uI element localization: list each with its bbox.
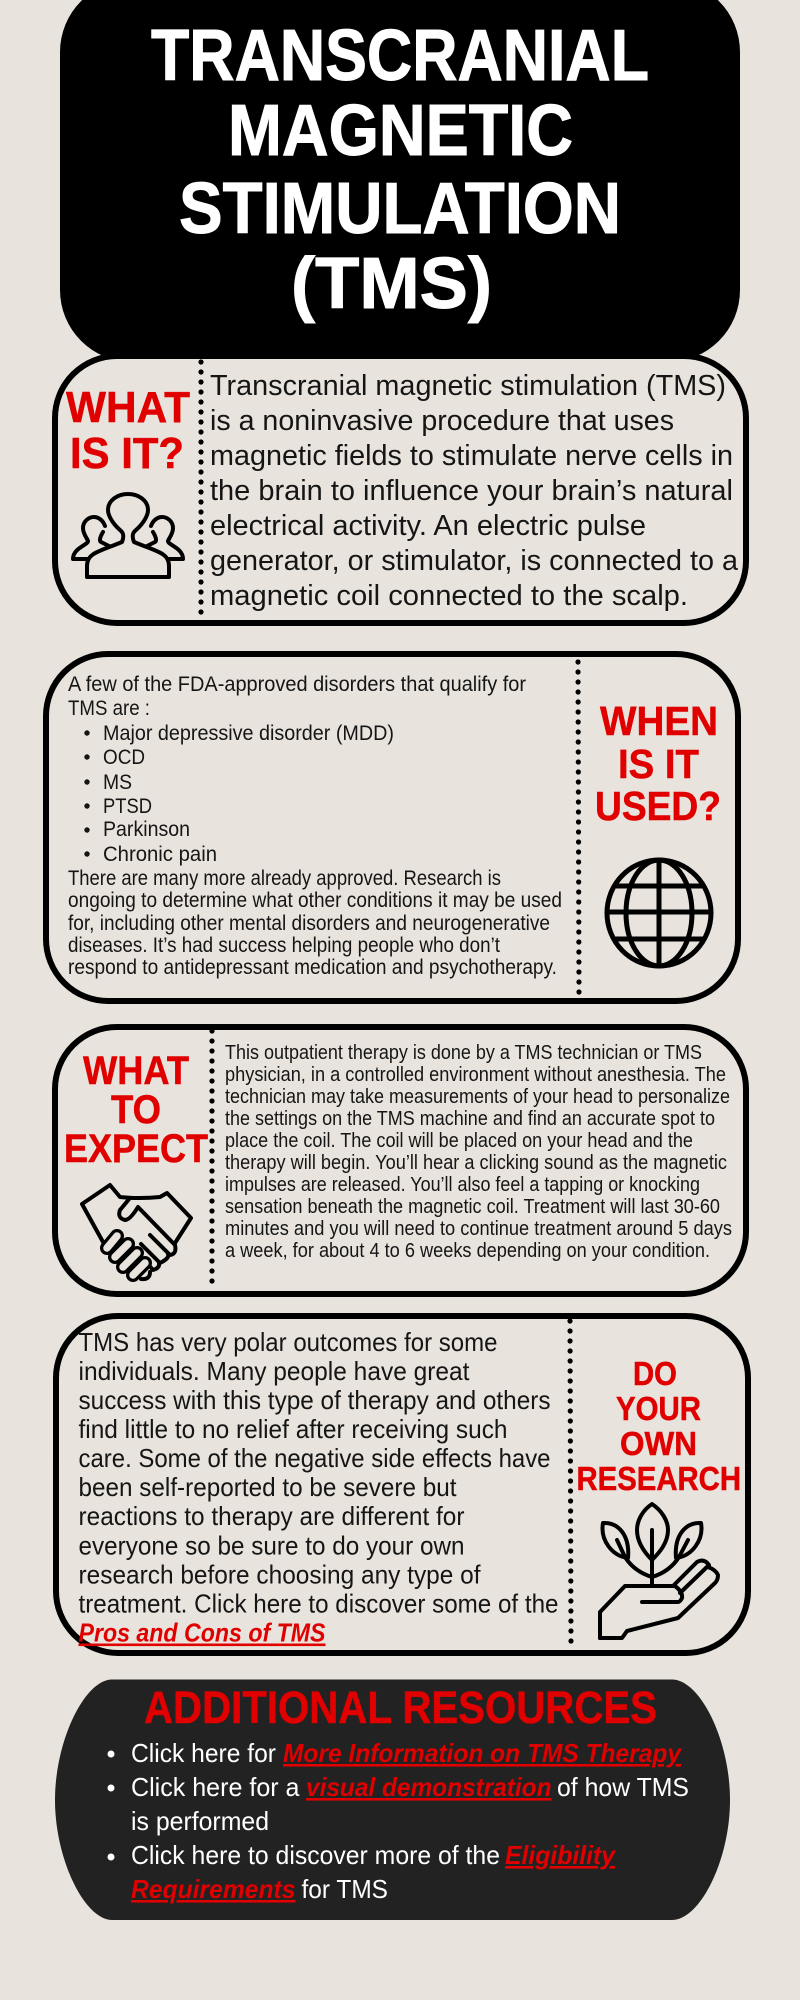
outcomes text: reactions to therapy are different for bbox=[78, 1501, 465, 1531]
resource list: of how TMS bbox=[557, 1772, 689, 1802]
resource list: More Information on TMS Therapy bbox=[283, 1738, 682, 1768]
resource list: Eligibility bbox=[505, 1840, 616, 1870]
outcomes text: care. Some of the negative side effects have bbox=[78, 1443, 550, 1473]
panel: what to expect bbox=[55, 1027, 746, 1294]
heading: do your own research: DO bbox=[633, 1355, 677, 1392]
outcomes text bbox=[78, 1327, 558, 1648]
panel: when is it used bbox=[46, 654, 738, 1001]
outcomes text: treatment. Click here to discover some of the bbox=[78, 1588, 558, 1618]
disorders text: ongoing to determine what other conditions it may be used bbox=[68, 889, 562, 912]
description text: magnetic coil connected to the scalp. bbox=[210, 580, 688, 612]
resource list: Click here for bbox=[131, 1738, 276, 1768]
heading: do your own research: OWN bbox=[620, 1425, 697, 1462]
heading: what to expect: EXPECT bbox=[64, 1127, 208, 1171]
heading: what is it: WHAT bbox=[66, 383, 190, 432]
resource list: visual demonstration bbox=[306, 1772, 552, 1802]
heading: what to expect: TO bbox=[111, 1088, 161, 1132]
disorders text: There are many more already approved. Research is bbox=[68, 867, 501, 890]
panel: what is it bbox=[55, 356, 746, 623]
procedure text: physician, in a controlled environment without anesthesia. The bbox=[225, 1063, 726, 1086]
outcomes text: been self-reported to be severe but bbox=[78, 1472, 457, 1502]
heading: additional resources: ADDITIONAL RESOURCES bbox=[144, 1682, 657, 1733]
heading: what to expect: WHAT bbox=[83, 1049, 189, 1093]
disorders text: MS bbox=[103, 771, 132, 794]
disorders text: diseases. It’s had success helping people who don’t bbox=[68, 934, 500, 957]
description text: magnetic fields to stimulate nerve cells in bbox=[210, 440, 733, 472]
title text: STIMULATION bbox=[179, 169, 621, 249]
disorders text: TMS are : bbox=[68, 697, 150, 720]
title text: (TMS) bbox=[291, 244, 492, 324]
disorders text: Parkinson bbox=[103, 818, 190, 841]
heading: when is it used: IS IT bbox=[618, 741, 699, 787]
disorders text: Major depressive disorder (MDD) bbox=[103, 722, 394, 745]
resource list bbox=[108, 1738, 689, 1904]
disorders text: Chronic pain bbox=[103, 843, 217, 866]
disorders text: for, including other mental disorders and neurogenerative bbox=[68, 912, 550, 935]
title text bbox=[151, 16, 649, 324]
title text: TRANSCRANIAL bbox=[151, 16, 649, 96]
heading: do your own research: RESEARCH bbox=[576, 1460, 741, 1497]
procedure text: place the coil. The coil will be placed on your head and the bbox=[225, 1129, 693, 1152]
disorders text: OCD bbox=[103, 746, 145, 769]
disorders text bbox=[68, 673, 562, 979]
heading: what to expect bbox=[64, 1049, 208, 1171]
icon: people bbox=[73, 494, 183, 577]
resource list: for TMS bbox=[302, 1874, 388, 1904]
description text: Transcranial magnetic stimulation (TMS) bbox=[210, 370, 726, 402]
description text: the brain to influence your brain’s natural bbox=[210, 475, 733, 507]
panel: do your own research bbox=[56, 1316, 748, 1653]
resource list: Click here to discover more of the bbox=[131, 1840, 500, 1870]
heading: when is it used: WHEN bbox=[600, 698, 718, 744]
procedure text bbox=[225, 1041, 732, 1262]
outcomes text: success with this type of therapy and others bbox=[78, 1385, 550, 1415]
outcomes text: research before choosing any type of bbox=[78, 1560, 481, 1590]
disorders text: respond to antidepressant medication and psychotherapy. bbox=[68, 956, 557, 979]
procedure text: technician may take measurements of your head to personalize bbox=[225, 1085, 730, 1108]
outcomes text: individuals. Many people have great bbox=[78, 1356, 470, 1386]
description text bbox=[210, 370, 738, 612]
resource list: Click here for a bbox=[131, 1772, 300, 1802]
panel: additional resources bbox=[55, 1680, 730, 1920]
resource list: is performed bbox=[131, 1806, 269, 1836]
procedure text: a week, for about 4 to 6 weeks depending on your condition. bbox=[225, 1239, 710, 1262]
title banner bbox=[60, 0, 740, 362]
description text: is a noninvasive procedure that uses bbox=[210, 405, 674, 437]
heading: what is it: IS IT? bbox=[70, 429, 184, 478]
description text: generator, or stimulator, is connected to a bbox=[210, 545, 738, 577]
icon: handshake bbox=[82, 1185, 191, 1279]
title text: MAGNETIC bbox=[228, 91, 573, 171]
procedure text: This outpatient therapy is done by a TMS technician or TMS bbox=[225, 1041, 702, 1064]
heading: when is it used: USED? bbox=[595, 783, 721, 829]
procedure text: therapy will begin. You’ll hear a clicking sound as the magnetic bbox=[225, 1151, 727, 1174]
description text: electrical activity. An electric pulse bbox=[210, 510, 646, 542]
procedure text: the settings on the TMS machine and find an accurate spot to bbox=[225, 1107, 715, 1130]
icon: plant in hand bbox=[600, 1504, 718, 1638]
heading: when is it used bbox=[595, 698, 721, 829]
procedure text: minutes and you will need to continue treatment around 5 days bbox=[225, 1217, 732, 1240]
heading: do your own research bbox=[576, 1355, 741, 1497]
procedure text: sensation beneath the magnetic coil. Treatment will last 30-60 bbox=[225, 1195, 720, 1218]
outcomes text: TMS has very polar outcomes for some bbox=[78, 1327, 498, 1357]
disorders text: PTSD bbox=[103, 795, 152, 818]
outcomes text: find little to no relief after receiving such bbox=[78, 1414, 508, 1444]
heading: what is it bbox=[66, 383, 190, 478]
outcomes text: Pros and Cons of TMS bbox=[78, 1618, 326, 1648]
disorders text: A few of the FDA-approved disorders that qualify for bbox=[68, 673, 526, 696]
resource list: Requirements bbox=[131, 1874, 296, 1904]
procedure text: impulses are released. You’ll also feel a tapping or knocking bbox=[225, 1173, 700, 1196]
icon: globe bbox=[606, 860, 712, 966]
outcomes text: everyone so be sure to do your own bbox=[78, 1530, 464, 1560]
heading: do your own research: YOUR bbox=[616, 1390, 701, 1427]
